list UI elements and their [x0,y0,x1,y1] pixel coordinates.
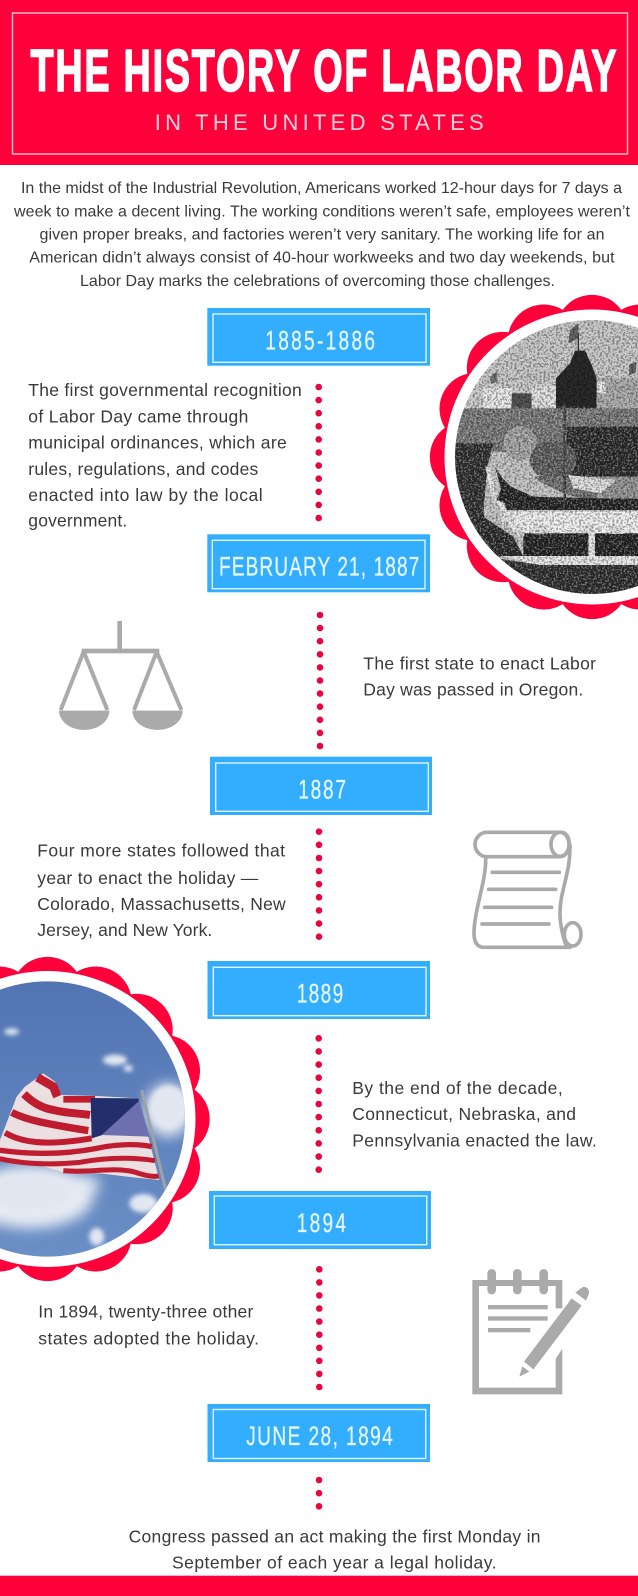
flag photo [0,980,192,1260]
dotted timeline segment 5 [316,1266,323,1390]
clouds [0,1083,192,1228]
text: four more states: Four more states followed that [37,841,285,861]
year box: 1889: 1889 [297,978,343,1008]
title: THE HISTORY OF LABOR DAY [30,39,616,104]
intro paragraph: week to make a decent living. The working conditions weren’t safe, employees weren’t [13,204,631,220]
intro paragraph: Labor Day marks the celebrations of overcoming those challenges. [80,273,555,290]
text: first governmental recognition: enacted into law by the local [28,485,263,505]
closing text: September of each year a legal holiday. [172,1552,496,1572]
text: first state Oregon: Day was passed in Oregon. [363,680,583,700]
flagpole [142,1090,166,1190]
flag stripes [0,1073,159,1180]
year box: 1889 [208,961,430,1019]
closing text [129,1526,540,1572]
text: first state Oregon: The first state to enact Labor [363,653,596,673]
flag canton [91,1098,149,1138]
scalloped red edge [0,957,210,1281]
year box: June 28, 1894: JUNE 28, 1894 [246,1421,393,1451]
text: first governmental recognition: municipal ordinances, which are [28,432,287,452]
text: twenty-three other states: states adopted the holiday. [38,1328,259,1348]
text: four more states: Jersey, and New York. [37,920,212,940]
subtitle: IN THE UNITED STATES [155,110,484,135]
year box: 1887: 1887 [298,774,346,804]
dotted timeline segment 1 [315,384,322,521]
year box: 1894: 1894 [297,1208,346,1238]
text: end of the decade [352,1078,597,1151]
dotted timeline segment 3 [316,828,322,940]
header banner [0,0,638,165]
text: twenty-three other states [38,1302,259,1348]
icon: paper scroll [474,832,581,947]
text: first governmental recognition: The first governmental recognition [28,380,302,400]
text: end of the decade: Pennsylvania enacted the law. [352,1131,597,1151]
closing text: Congress passed an act making the first Monday in [129,1526,540,1546]
photo medallion: 1886 parade engraving [430,295,638,619]
small clouds [0,1028,187,1245]
text: four more states [37,841,286,940]
icon: notepad and pencil [472,1269,589,1394]
year box: 1887 [210,757,432,815]
text: four more states: year to enact the holiday — [37,868,259,888]
year box: June 28, 1894 [208,1404,430,1462]
intro paragraph: In the midst of the Industrial Revolution, Americans worked 12-hour days for 7 days a [21,180,622,197]
text: four more states: Colorado, Massachusetts, New [37,894,286,914]
icon: balance scale [59,621,183,730]
intro paragraph: given proper breaks, and factories weren’t very sanitary. The working life for an [40,226,604,244]
year box: 1894 [209,1191,431,1249]
year box: 1885-1886: 1885-1886 [265,325,375,355]
text: first governmental recognition: government. [28,511,127,531]
dotted timeline segment 4 [315,1035,322,1173]
year box: February 21, 1887 [207,534,430,592]
text: twenty-three other states: In 1894, twenty-three other [38,1302,253,1322]
text: end of the decade: By the end of the decade, [352,1078,563,1098]
dotted timeline segment 6 [316,1477,322,1510]
scalloped red edge [430,295,638,619]
text: end of the decade: Connecticut, Nebraska, and [352,1104,576,1124]
text: first state Oregon [363,653,596,700]
footer bar [0,1576,638,1596]
intro paragraph [13,180,631,290]
engraving image [453,318,638,597]
year box: 1885-1886 [207,308,430,366]
intro paragraph: American didn’t always consist of 40-hour workweeks and two day weekends, but [29,250,615,266]
text: first governmental recognition [28,380,302,531]
text: first governmental recognition: of Labor Day came through [28,406,248,426]
text: first governmental recognition: rules, regulations, and codes [28,459,259,479]
dotted timeline segment 2 [317,612,323,749]
photo medallion: American flag [0,957,210,1281]
year box: February 21, 1887: FEBRUARY 21, 1887 [219,551,419,581]
